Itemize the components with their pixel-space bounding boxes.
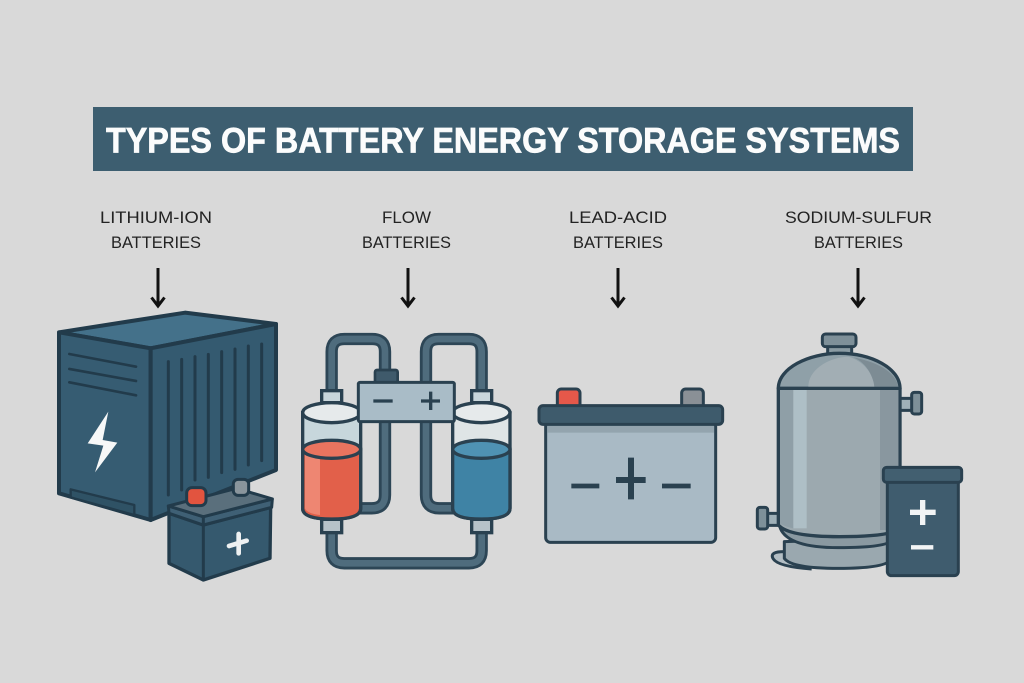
- arrow: flow: [402, 268, 414, 306]
- icon: lead-acid battery: [539, 389, 723, 542]
- small cell: [883, 467, 962, 576]
- left tank: red: [303, 391, 361, 533]
- pipes: [332, 339, 482, 563]
- arrow: sodium-sulfur: [852, 268, 864, 306]
- title banner: [93, 107, 913, 171]
- label: flow batteries: FLOW: [382, 208, 431, 227]
- icon: sodium-sulfur tank: [757, 334, 962, 576]
- title banner: TYPES OF BATTERY ENERGY STORAGE SYSTEMS: [106, 122, 900, 160]
- base: [772, 525, 892, 569]
- side ports: [757, 392, 922, 529]
- body: [778, 388, 900, 537]
- label: sodium-sulfur batteries: SODIUM-SULFUR: [785, 208, 932, 227]
- label: lithium-ion batteries: LITHIUM-ION: [100, 208, 212, 227]
- control box: [358, 370, 454, 422]
- icon: lithium-ion battery cabinet: [59, 313, 276, 580]
- icon: small battery: [168, 479, 272, 580]
- right tank: blue: [453, 391, 510, 533]
- cap: [828, 345, 852, 355]
- dome: [778, 353, 900, 388]
- label: lithium-ion batteries: [100, 208, 212, 252]
- arrow: lead-acid: [612, 268, 624, 306]
- arrow: lithium-ion: [152, 268, 164, 306]
- label: flow batteries: [362, 208, 451, 252]
- label: lithium-ion batteries: BATTERIES: [111, 233, 201, 252]
- label: lead-acid batteries: BATTERIES: [573, 233, 663, 252]
- label: lead-acid batteries: [569, 208, 667, 252]
- label: sodium-sulfur batteries: BATTERIES: [814, 233, 903, 252]
- label: flow batteries: BATTERIES: [362, 233, 451, 252]
- icon: flow battery: [303, 339, 510, 563]
- label: sodium-sulfur batteries: [785, 208, 932, 252]
- label: lead-acid batteries: LEAD-ACID: [569, 208, 667, 227]
